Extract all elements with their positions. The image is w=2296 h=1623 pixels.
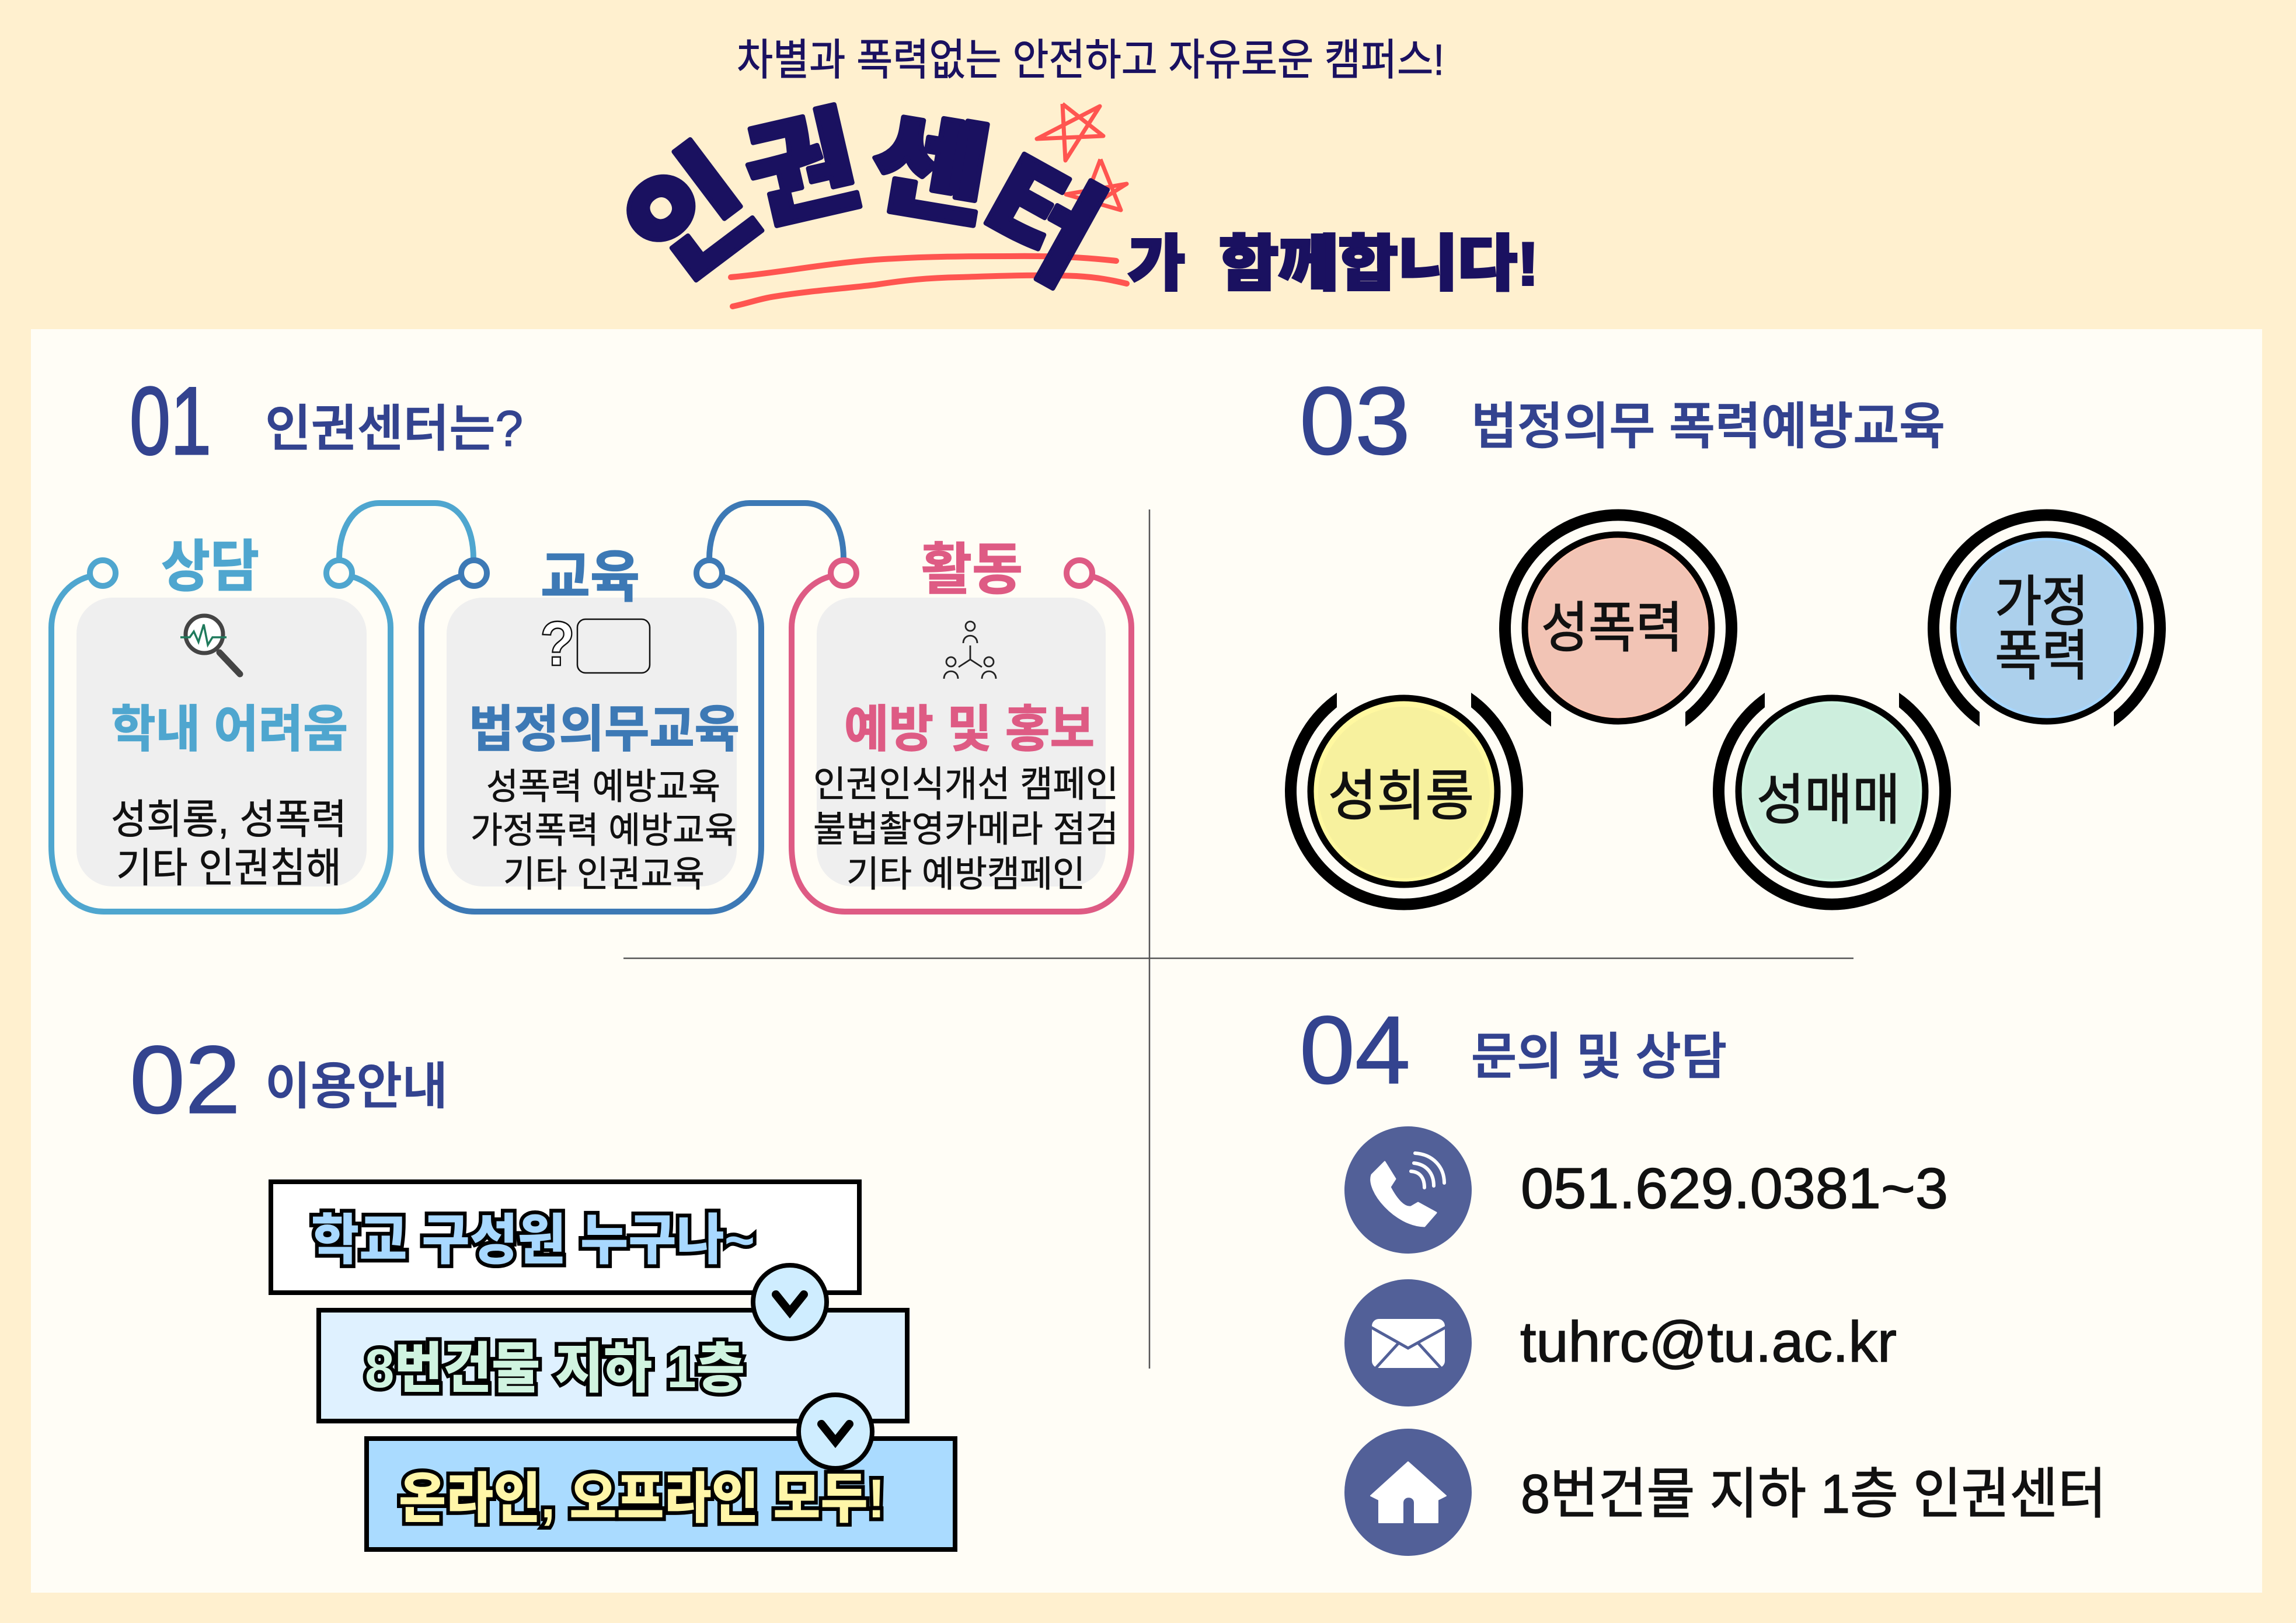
card: 활동 bbox=[792, 539, 1131, 912]
header bbox=[603, 36, 1539, 308]
main title: 인권센터: 인 bbox=[603, 125, 780, 308]
card: 활동: 예방 및 홍보 bbox=[844, 701, 1095, 758]
card: 활동: 인권인식개선 캠페인 bbox=[813, 765, 1119, 805]
card: 교육 bbox=[421, 503, 844, 912]
decorative red underline strokes bbox=[731, 256, 1127, 306]
icon: network of people bbox=[944, 622, 996, 679]
dividers bbox=[623, 509, 1853, 1369]
icon: question box bbox=[540, 608, 650, 679]
contact: phone bbox=[1344, 1126, 1948, 1254]
banner: 8번건물 지하 1층 bbox=[319, 1310, 907, 1421]
section 04 heading: 04 bbox=[1299, 996, 1410, 1104]
section 03 circles bbox=[1285, 509, 2166, 910]
circle: 가정폭력: 폭력 bbox=[1995, 625, 2089, 686]
section 02 heading: 이용안내 bbox=[265, 1059, 448, 1115]
banner: 학교 구성원 누구나: 학교 구성원 누구나~ bbox=[311, 1209, 755, 1271]
banner: 온라인, 오프라인 모두: 온라인, 오프라인 모두! bbox=[399, 1468, 885, 1529]
contact: email bbox=[1344, 1279, 1897, 1406]
card: 교육: 가정폭력 예방교육 bbox=[471, 811, 737, 851]
section 04 contact bbox=[1344, 1126, 2106, 1556]
circle: 가정폭력 bbox=[1928, 509, 2166, 727]
card: 활동: 활동 bbox=[921, 539, 1023, 601]
contact: location bbox=[1344, 1429, 2106, 1556]
icon: magnifier bbox=[180, 616, 240, 674]
section 04 heading bbox=[1299, 996, 1727, 1104]
main title: 인권센터: 센 bbox=[862, 100, 998, 242]
card: 교육: 법정의무교육 bbox=[469, 701, 740, 758]
icon: red stars bbox=[1037, 104, 1127, 213]
card: 상담: 성희롱, 성폭력 bbox=[111, 797, 347, 842]
banner: 학교 구성원 누구나 bbox=[271, 1182, 859, 1293]
main title: 인권센터: 권 bbox=[734, 96, 870, 245]
card: 상담: 학내 어려움 bbox=[111, 701, 348, 758]
icon: question box: ? bbox=[540, 608, 575, 679]
circle: 성희롱: 성희롱 bbox=[1328, 765, 1474, 826]
circle: 성희롱 bbox=[1285, 693, 1523, 910]
card: 활동: 불법촬영카메라 점검 bbox=[813, 809, 1119, 850]
circle: 성폭력 bbox=[1499, 509, 1737, 727]
subtitle: 차별과 폭력없는 안전하고 자유로운 캠퍼스! bbox=[737, 36, 1444, 84]
section 01 heading bbox=[130, 367, 523, 474]
contact: location: 8번건물 지하 1층 인권센터 bbox=[1521, 1463, 2106, 1524]
section 02 heading: 02 bbox=[130, 1026, 241, 1133]
section 03 heading bbox=[1299, 367, 1945, 474]
banner: 8번건물 지하 1층: 8번건물 지하 1층 bbox=[365, 1338, 745, 1399]
contact: phone: 051.629.0381~3 bbox=[1521, 1156, 1948, 1220]
circle: 성매매 bbox=[1713, 693, 1951, 910]
section 03 heading: 법정의무 폭력예방교육 bbox=[1471, 399, 1945, 455]
main title continuation: 가 bbox=[1128, 231, 1185, 298]
banner: 온라인, 오프라인 모두 bbox=[367, 1439, 955, 1549]
contact: email: tuhrc@tu.ac.kr bbox=[1520, 1310, 1897, 1374]
card: 활동: 기타 예방캠페인 bbox=[846, 854, 1085, 895]
section 01 heading: 01 bbox=[130, 367, 211, 474]
main title: 인권센터 bbox=[603, 96, 1120, 308]
circle: 성매매: 성매매 bbox=[1757, 769, 1900, 830]
card: 상담 bbox=[51, 503, 473, 912]
circle: 성폭력: 성폭력 bbox=[1541, 597, 1683, 658]
icon: chevron connector 2 bbox=[799, 1395, 872, 1468]
circle: 가정폭력: 가정 bbox=[1995, 571, 2089, 632]
section 03 heading: 03 bbox=[1299, 367, 1410, 474]
card: 교육: 교육 bbox=[541, 546, 640, 609]
icon: chevron connector 1 bbox=[753, 1265, 827, 1339]
card: 교육: 기타 인권교육 bbox=[503, 854, 705, 895]
main title: 인권센터: 터 bbox=[959, 135, 1120, 306]
section 02 stacked banners bbox=[271, 1182, 955, 1549]
section 02 heading bbox=[130, 1026, 448, 1133]
card: 상담: 상담 bbox=[161, 536, 259, 598]
main title continuation: 함께합니다! bbox=[1219, 231, 1539, 298]
section 01 heading: 인권센터는? bbox=[265, 401, 523, 457]
section 04 heading: 문의 및 상담 bbox=[1471, 1029, 1727, 1085]
card: 교육: 성폭력 예방교육 bbox=[486, 767, 720, 807]
card: 상담: 기타 인권침해 bbox=[116, 845, 342, 891]
section 01 cards bbox=[51, 503, 1131, 912]
